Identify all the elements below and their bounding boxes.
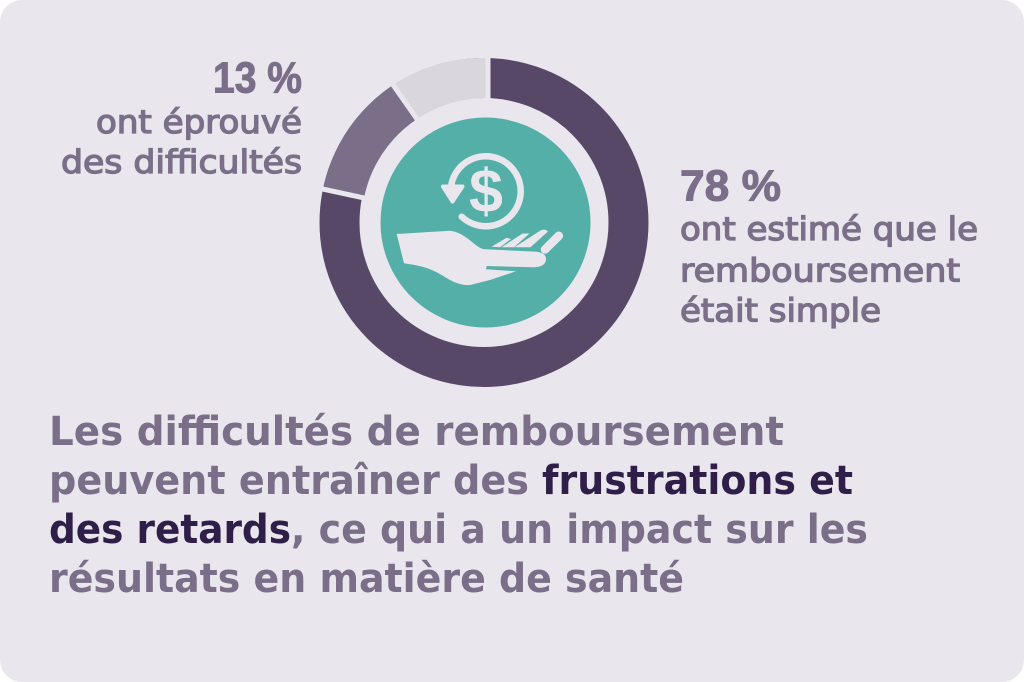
stat: 78 %: 78 %: [680, 162, 781, 211]
label: ont estimé que le remboursement était simple: [680, 210, 978, 330]
label: ont éprouvé des difficultés: ont éprouvé: [96, 103, 302, 141]
text block: main statement: [49, 409, 868, 602]
text block: main statement: résultats en matière de santé: [49, 556, 684, 602]
stat: 13 %: 13 %: [213, 54, 302, 103]
icon: open hand: [397, 230, 559, 285]
icon: money back in a hand: [380, 118, 590, 328]
segment: 78 % simple: [340, 78, 628, 367]
icon: dollar sign: $: [469, 157, 503, 225]
text block: main statement: frustrations et: [542, 458, 853, 504]
label: ont estimé que le remboursement était simple: était simple: [680, 292, 881, 330]
text block: main statement: peuvent entraîner des: [49, 458, 529, 504]
callout: 78 %: [680, 162, 978, 330]
label: ont éprouvé des difficultés: [61, 103, 302, 181]
donut chart: [318, 55, 628, 367]
text block: main statement: des retards: [49, 507, 291, 553]
label: ont estimé que le remboursement était simple: ont estimé que le: [680, 210, 978, 248]
text block: main statement: Les difficultés de remboursement: [49, 409, 784, 455]
label: ont estimé que le remboursement était simple: remboursement: [680, 252, 960, 290]
segment: 13 % difficulties: [323, 85, 417, 198]
label: ont éprouvé des difficultés: des difficultés: [61, 143, 302, 181]
callout: 13 %: [61, 54, 302, 181]
icon: circular arrow: [443, 156, 521, 226]
text block: main statement: , ce qui a un impact sur les: [291, 507, 868, 553]
segment: remainder: [393, 58, 488, 119]
